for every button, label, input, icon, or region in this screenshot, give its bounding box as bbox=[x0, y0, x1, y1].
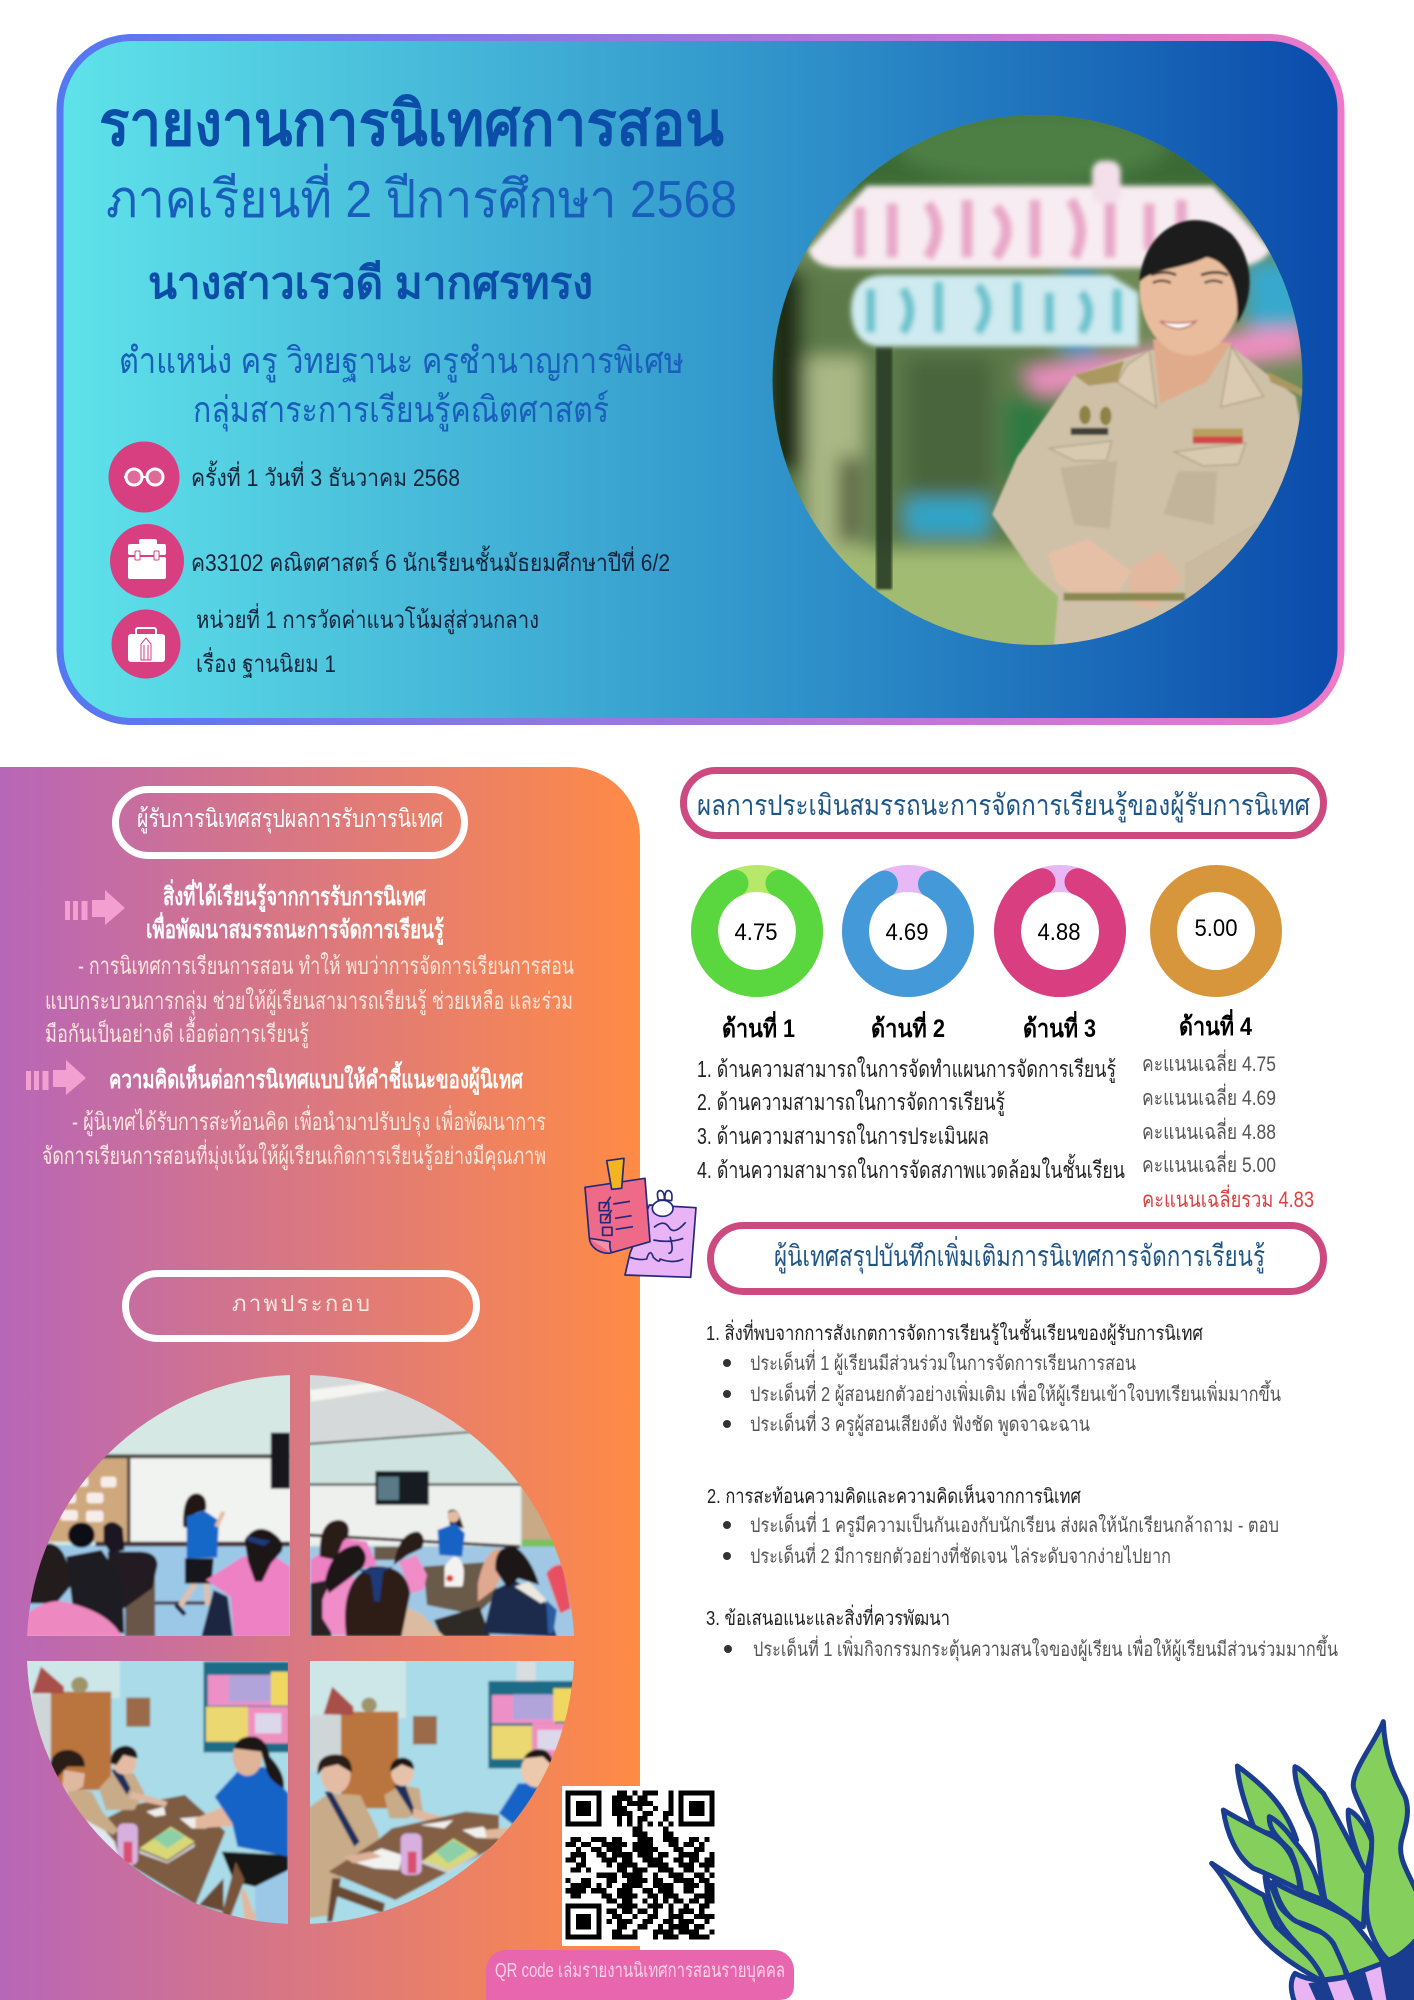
desks bbox=[374, 1547, 497, 1615]
domain list bbox=[697, 1056, 1125, 1183]
student two bbox=[384, 1785, 423, 1818]
position: กลุ่มสาระการเรียนรู้คณิตศาสตร์ bbox=[193, 389, 609, 432]
score list bbox=[1142, 1049, 1314, 1212]
score list: คะแนนเฉลี่ย 4.75 bbox=[1142, 1049, 1276, 1076]
visit date text: ครั้งที่ 1 วันที่ 3 ธันวาคม 2568 bbox=[191, 460, 460, 492]
teacher portrait bbox=[772, 115, 1302, 645]
score list: คะแนนเฉลี่ย 5.00 bbox=[1142, 1150, 1276, 1177]
notes section 1: ประเด็นที่ 1 ผู้เรียนมีส่วนร่วมในการจัดการเรียนการสอน bbox=[750, 1349, 1136, 1376]
photo: teacher and students smiling bbox=[308, 1655, 578, 1925]
unit and topic text: หน่วยที่ 1 การวัดค่าแนวโน้มสู่ส่วนกลาง bbox=[196, 603, 539, 635]
course text: ค33102 คณิตศาสตร์ 6 นักเรียนชั้นมัธยมศึกษาปีที่ 6/2 bbox=[191, 545, 670, 577]
heading pill: evaluation results bbox=[684, 770, 1324, 836]
notes section 2: 2. การสะท้อนความคิดและความคิดเห็นจากการนิเทศ bbox=[707, 1483, 1081, 1508]
donut labels: ด้านที่ 1 bbox=[722, 1011, 795, 1043]
paragraph: what was learned: มือกันเป็นอย่างดี เอื้อต่อการเรียนรู้ bbox=[45, 1016, 309, 1049]
unit and topic text: เรื่อง ฐานนิยม 1 bbox=[196, 647, 336, 678]
QR code bbox=[562, 1786, 715, 1946]
unit and topic text bbox=[196, 603, 539, 678]
QR code label bbox=[486, 1950, 794, 2000]
blurred sign bbox=[808, 161, 1271, 346]
photo: teacher at whiteboard bbox=[25, 1370, 292, 1640]
heading pill: additional notes bbox=[710, 1226, 1324, 1292]
heading pill: additional notes: ผู้นิเทศสรุปบันทึกเพิ่มเติมการนิเทศการจัดการเรียนรู้ bbox=[774, 1236, 1265, 1274]
notes section 2: ประเด็นที่ 2 มีการยกตัวอย่างที่ชัดเจน ไล่ระดับจากง่ายไปยาก bbox=[750, 1542, 1171, 1568]
plant illustration bbox=[1212, 1722, 1414, 2000]
donut chart: domain 4: 5.00 bbox=[1194, 915, 1238, 942]
icon: clipped notes bbox=[585, 1158, 696, 1277]
heading pill: photos bbox=[126, 1274, 476, 1338]
paragraph: opinion: - ผู้นิเทศได้รับการสะท้อนคิด เพื่อนำมาปรับปรุง เพื่อพัฒนาการ bbox=[72, 1105, 546, 1137]
heading pill: evaluation results: ผลการประเมินสมรรถนะการจัดการเรียนรู้ของผู้รับการนิเทศ bbox=[697, 790, 1310, 823]
paragraph: what was learned: - การนิเทศการเรียนการสอน ทำให้ พบว่าการจัดการเรียนการสอน bbox=[78, 952, 574, 980]
donut chart: domain 1 bbox=[704, 878, 810, 984]
icon: briefcase with pencil bbox=[112, 610, 180, 678]
position: ตำแหน่ง ครู วิทยฐานะ ครูชำนาญการพิเศษ bbox=[119, 340, 684, 383]
desk bbox=[90, 1795, 225, 1905]
notes section 1: ประเด็นที่ 3 ครูผู้สอนเสียงดัง ฟังชัด พูดจาฉะฉาน bbox=[750, 1410, 1090, 1437]
notes section 3 bbox=[706, 1604, 1338, 1662]
donut chart: domain 1: 4.75 bbox=[734, 919, 778, 946]
domain list: 4. ด้านความสามารถในการจัดสภาพแวดล้อมในชั้นเรียน bbox=[697, 1154, 1125, 1183]
paragraph: opinion bbox=[42, 1105, 546, 1171]
donut chart: domain 3 bbox=[1008, 878, 1113, 984]
notes section 3: 3. ข้อเสนอแนะและสิ่งที่ควรพัฒนา bbox=[706, 1604, 950, 1630]
supervisor bbox=[194, 1806, 234, 1830]
paragraph: what was learned bbox=[45, 952, 574, 1049]
subheading: opinion: ความคิดเห็นต่อการนิเทศแบบให้คำชี้แนะของผู้นิเทศ bbox=[109, 1060, 524, 1096]
subtitle: ภาคเรียนที่ 2 ปีการศึกษา 2568 bbox=[106, 163, 737, 229]
subheading: what was learned: สิ่งที่ได้เรียนรู้จากการรับการนิเทศ bbox=[163, 879, 427, 913]
donut chart: domain 2 bbox=[855, 878, 960, 984]
supervisor bbox=[485, 1827, 518, 1838]
score list: คะแนนเฉลี่ย 4.69 bbox=[1142, 1083, 1276, 1110]
donut labels: ด้านที่ 4 bbox=[1179, 1009, 1252, 1041]
notes section 1 bbox=[706, 1319, 1281, 1437]
arrow icon 2 bbox=[26, 1060, 86, 1095]
score list: คะแนนเฉลี่ย 4.88 bbox=[1142, 1117, 1276, 1144]
neck and face bbox=[1153, 339, 1231, 404]
notes section 2: ประเด็นที่ 1 ครูมีความเป็นกันเองกับนักเรียน ส่งผลให้นักเรียนกล้าถาม - ตอบ bbox=[750, 1511, 1279, 1538]
score list: คะแนนเฉลี่ยรวม 4.83 bbox=[1142, 1184, 1314, 1212]
donut labels bbox=[722, 1009, 1252, 1043]
uniform bbox=[992, 220, 1306, 660]
icon: glasses bbox=[108, 442, 180, 512]
donut labels: ด้านที่ 3 bbox=[1023, 1011, 1096, 1043]
icon: toolbox bbox=[110, 524, 184, 598]
hands bbox=[1048, 540, 1131, 594]
domain list: 2. ด้านความสามารถในการจัดการเรียนรู้ bbox=[697, 1089, 1005, 1116]
domain list: 1. ด้านความสามารถในการจัดทำแผนการจัดการเรียนรู้ bbox=[697, 1056, 1116, 1083]
donut chart: domain 2: 4.69 bbox=[886, 919, 928, 946]
left panel bbox=[0, 767, 640, 2000]
arrow icon 1 bbox=[65, 890, 125, 925]
donut chart: domain 3: 4.88 bbox=[1038, 919, 1080, 946]
subheading: what was learned: เพื่อพัฒนาสมรรถนะการจัดการเรียนรู้ bbox=[146, 912, 444, 946]
student one bbox=[308, 1793, 381, 1918]
paragraph: what was learned: แบบกระบวนการกลุ่ม ช่วยให้ผู้เรียนสามารถเรียนรู้ ช่วยเหลือ และร่วม bbox=[45, 987, 573, 1016]
position bbox=[119, 340, 684, 432]
donut chart: domain 4 bbox=[1164, 878, 1268, 984]
title: รายงานการนิเทศการสอน bbox=[99, 90, 724, 159]
teacher bbox=[448, 1510, 464, 1528]
heading pill: supervision summary: ผู้รับการนิเทศสรุปผลการรับการนิเทศ bbox=[137, 805, 443, 834]
donut labels: ด้านที่ 2 bbox=[871, 1011, 945, 1043]
notes section 2 bbox=[707, 1483, 1279, 1568]
QR code label: QR code เล่มรายงานนิเทศการสอนรายบุคคล bbox=[495, 1960, 785, 1983]
notes section 1: 1. สิ่งที่พบจากการสังเกตการจัดการเรียนรู้ในชั้นเรียนของผู้รับการนิเทศ bbox=[706, 1319, 1203, 1346]
header panel bbox=[60, 38, 1341, 722]
students bbox=[125, 1577, 155, 1637]
students bbox=[67, 1788, 118, 1835]
paragraph: opinion: จัดการเรียนการสอนที่มุ่งเน้นให้ผู้เรียนเกิดการเรียนรู้อย่างมีคุณภาพ bbox=[42, 1139, 546, 1171]
subheading: what was learned bbox=[146, 879, 444, 946]
students bbox=[311, 1538, 377, 1592]
heading pill: photos: ภาพประกอบ bbox=[232, 1291, 370, 1316]
teacher bbox=[183, 1493, 206, 1528]
teacher name: นางสาวเรวดี มากศรทรง bbox=[148, 259, 593, 308]
notes section 1: ประเด็นที่ 2 ผู้สอนยกตัวอย่างเพิ่มเติม เพื่อให้ผู้เรียนเข้าใจบทเรียนเพิ่มมากขึ้น bbox=[750, 1380, 1281, 1407]
bottle and books bbox=[118, 1823, 138, 1865]
domain list: 3. ด้านความสามารถในการประเมินผล bbox=[697, 1123, 989, 1149]
photo: teacher with students at desk bbox=[25, 1655, 292, 1925]
desks bbox=[329, 1812, 499, 1900]
heading pill: supervision summary bbox=[116, 790, 464, 856]
photo: teacher at front of class bbox=[308, 1370, 578, 1640]
